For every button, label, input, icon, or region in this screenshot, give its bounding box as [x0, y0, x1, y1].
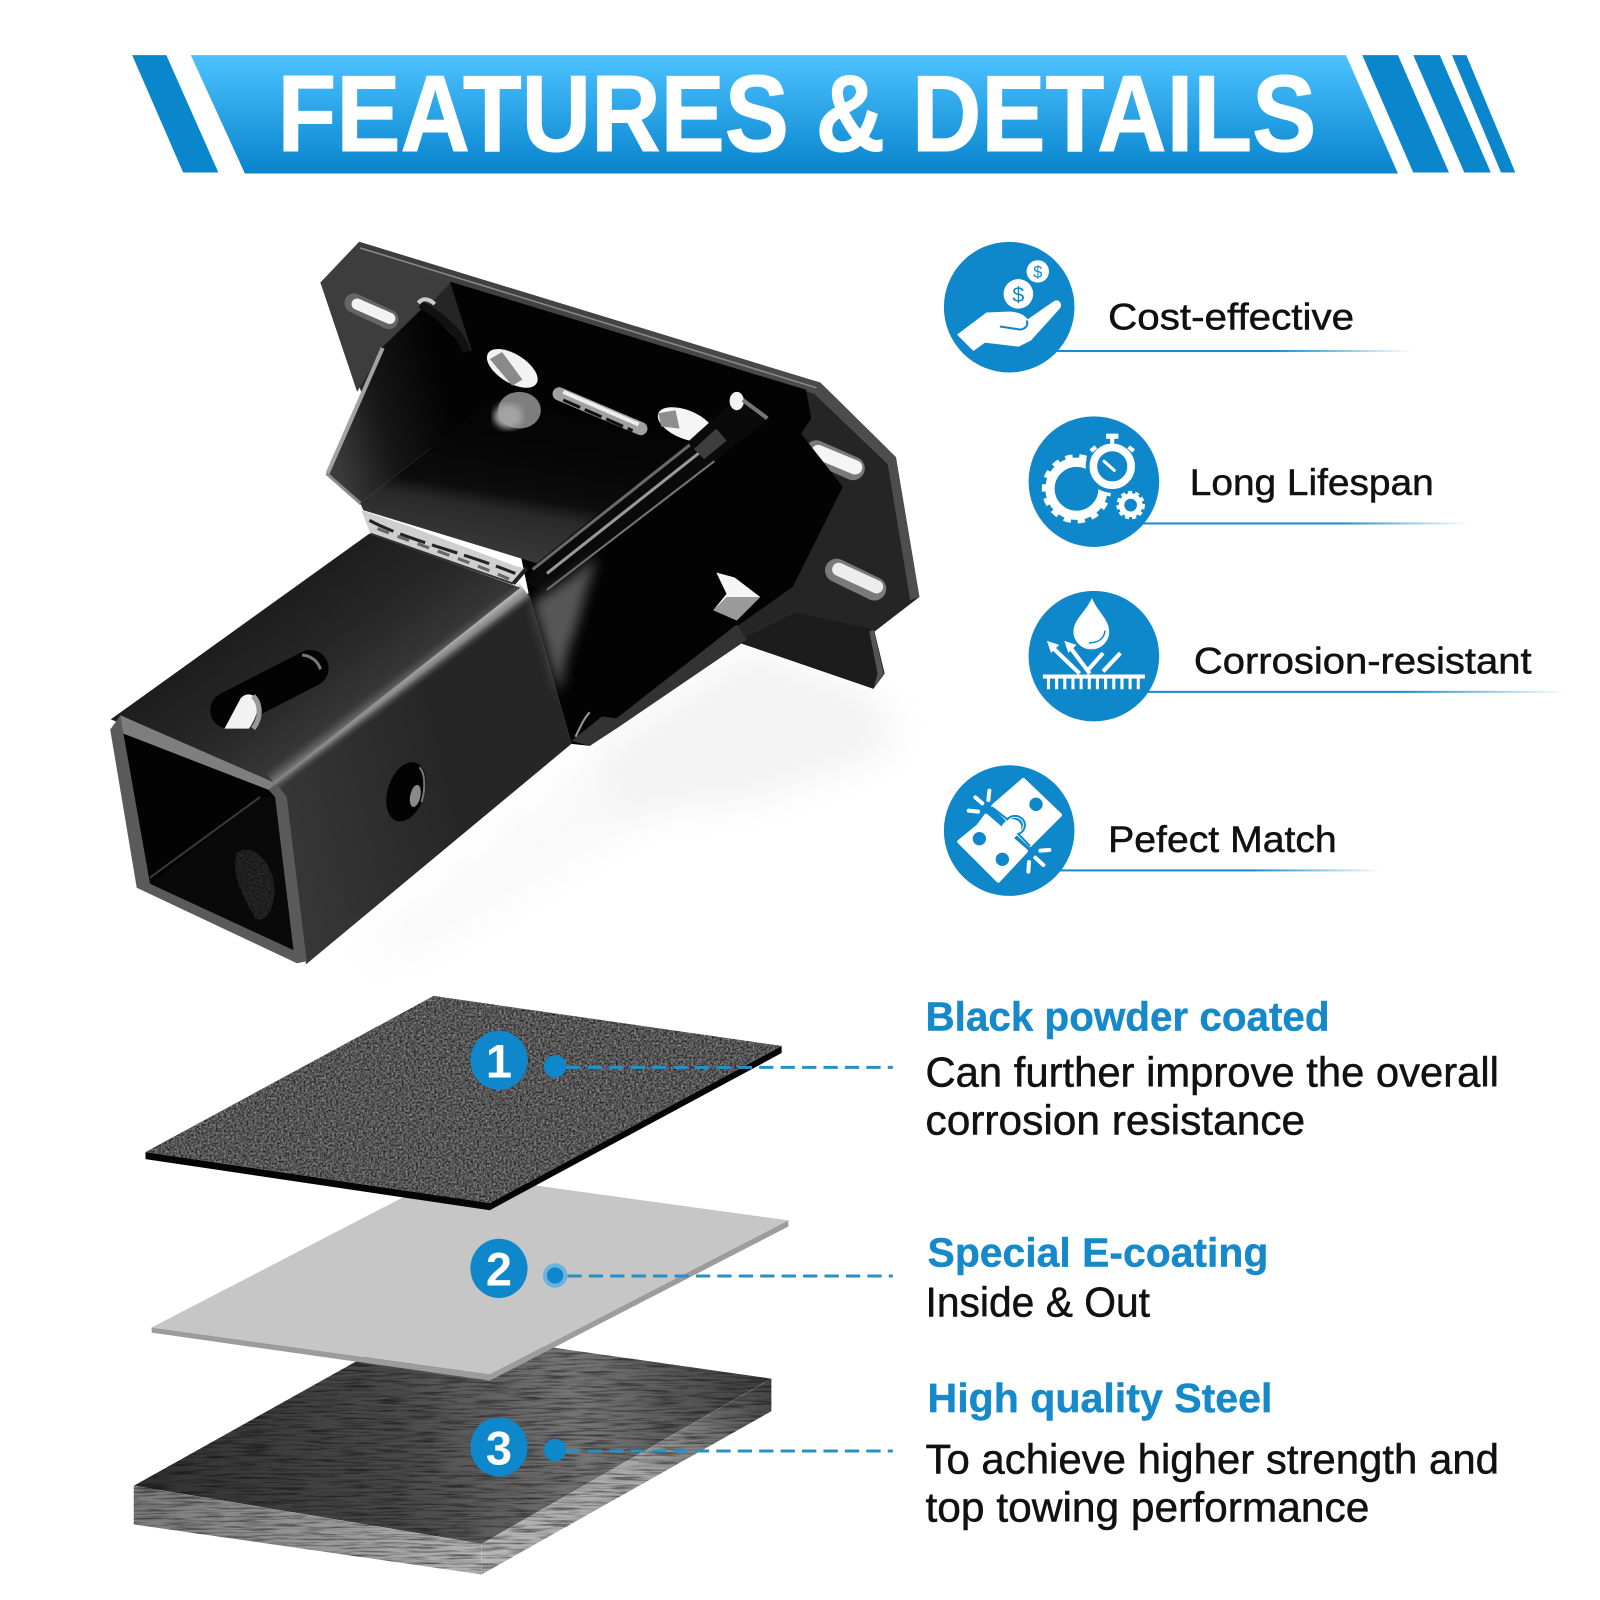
icon: hand with coins — [944, 242, 1074, 372]
description — [926, 1049, 1499, 1144]
feature: long lifespan — [1029, 416, 1469, 547]
label: Long Lifespan — [1190, 462, 1434, 503]
marker 3: 3 — [486, 1422, 512, 1474]
marker 3 — [470, 1417, 893, 1477]
text block: special e-coating — [926, 1229, 1268, 1325]
description: To achieve higher strength and — [926, 1435, 1499, 1482]
saddle right rail — [527, 392, 767, 592]
tube top face — [111, 534, 520, 783]
title banner — [132, 53, 1515, 174]
label: Corrosion-resistant — [1194, 640, 1532, 681]
marker 1 — [470, 1031, 893, 1090]
product photo: hitch receiver — [110, 242, 919, 964]
white gap below side plate — [713, 572, 760, 620]
layer 3: steel block — [134, 1327, 771, 1574]
black gloss zone on plate and side plate — [450, 282, 843, 746]
label: Pefect Match — [1108, 819, 1337, 860]
divider line — [1056, 350, 1413, 352]
tube edge highlight — [265, 581, 533, 791]
text block: high quality steel — [926, 1375, 1499, 1530]
description — [926, 1435, 1499, 1530]
ground shadow — [347, 648, 898, 964]
description: corrosion resistance — [926, 1097, 1305, 1144]
lower bracket rim — [571, 624, 747, 746]
tube side face — [274, 593, 571, 964]
heading: High quality Steel — [928, 1375, 1272, 1421]
divider line — [1148, 691, 1566, 693]
divider line — [1143, 522, 1469, 524]
description: top towing performance — [926, 1483, 1369, 1530]
label: Cost-effective — [1108, 297, 1354, 338]
description: Can further improve the overall — [926, 1049, 1499, 1096]
marker 1: 1 — [486, 1036, 512, 1088]
icon: hand with coins: $ — [1012, 283, 1024, 307]
feature: perfect match — [944, 765, 1383, 896]
description: Inside & Out — [926, 1278, 1150, 1325]
icon: hand with coins: $ — [1033, 264, 1042, 282]
feature: corrosion-resistant — [1029, 591, 1566, 721]
plate slots — [354, 303, 877, 589]
upper weld bead — [559, 392, 641, 431]
feature: cost-effective — [944, 242, 1413, 372]
layer 2: e-coating sheet — [152, 1173, 788, 1381]
top slot hole — [224, 655, 320, 729]
title: FEATURES & DETAILS — [278, 53, 1316, 174]
lower weld bead — [361, 510, 527, 584]
banner right stripes — [1362, 55, 1515, 172]
upper lug — [418, 299, 466, 352]
gusset wall — [327, 306, 497, 503]
marker 2: 2 — [486, 1244, 512, 1296]
saddle holes — [480, 341, 719, 449]
icon: gears and stopwatch — [1029, 416, 1159, 547]
layer 1: powder coat sheet — [146, 996, 782, 1210]
side gloss patch — [533, 556, 597, 694]
front face rim — [110, 715, 307, 963]
icon: puzzle pieces — [944, 765, 1074, 896]
banner main band — [191, 55, 1398, 173]
divider line — [1056, 869, 1383, 871]
heading: Special E-coating — [928, 1229, 1268, 1275]
layer diagram — [134, 996, 893, 1574]
icon: water drop on surface — [1029, 591, 1159, 721]
heading: Black powder coated — [926, 994, 1330, 1040]
text block: black powder coated — [926, 994, 1499, 1144]
banner left stripe — [132, 55, 218, 172]
side pin hole — [379, 757, 433, 827]
marker 2 — [470, 1239, 893, 1298]
mounting plate — [320, 242, 919, 689]
saddle floor — [360, 397, 687, 563]
